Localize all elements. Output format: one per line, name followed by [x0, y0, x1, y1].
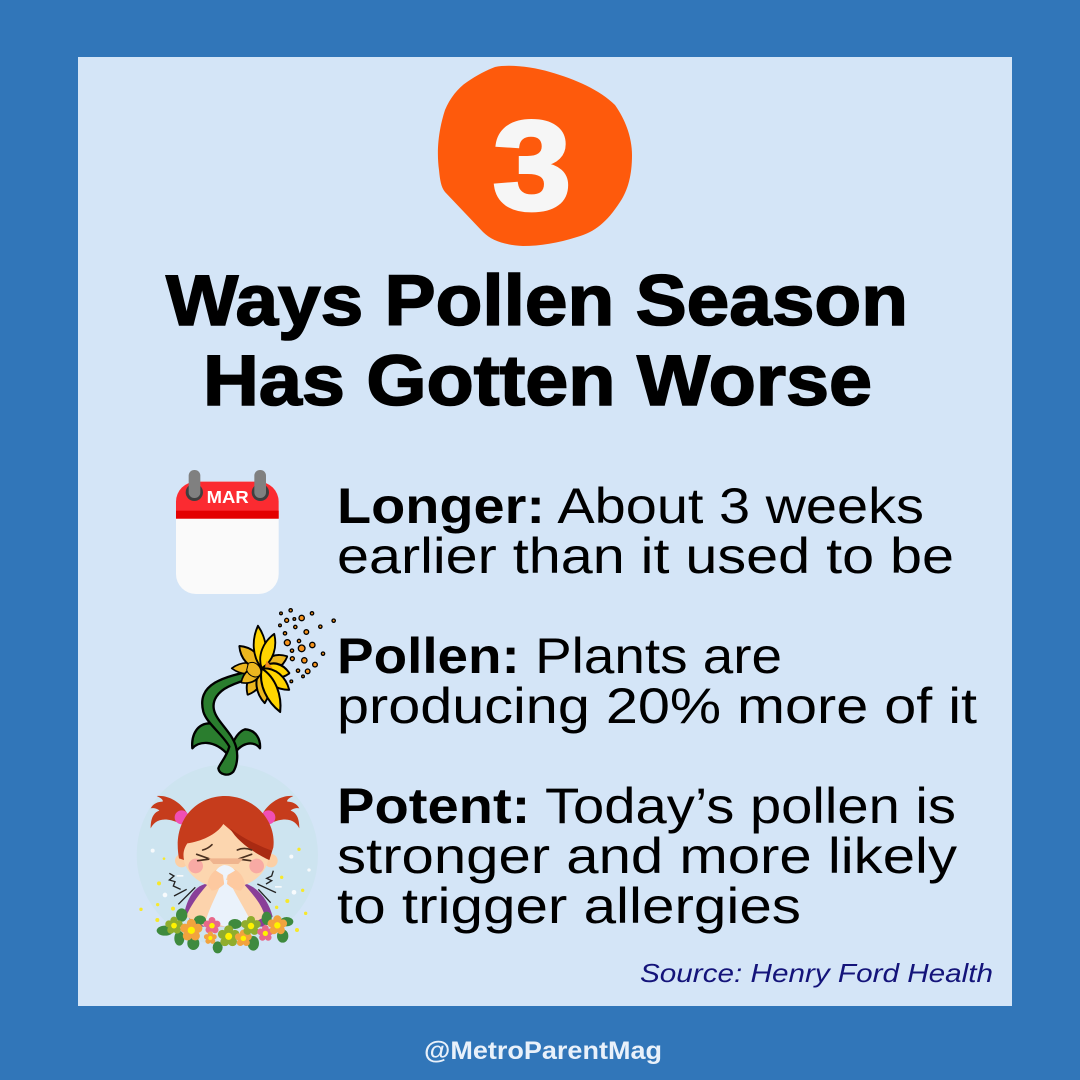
pigtails — [151, 796, 299, 828]
hair — [178, 796, 274, 860]
icon: calendar: MAR — [207, 487, 249, 507]
text block: longer: Longer: About 3 weeks — [337, 478, 924, 534]
face — [183, 822, 269, 888]
text block: pollen: producing 20% more of it — [337, 678, 977, 734]
hands — [207, 867, 224, 891]
body — [185, 884, 273, 927]
tissue — [206, 880, 249, 928]
flower stem and leaves — [192, 670, 260, 775]
text block: potent: stronger and more likely — [337, 828, 957, 884]
text block: pollen — [337, 628, 977, 734]
arms — [186, 883, 265, 927]
sneeze marks — [169, 871, 276, 904]
text block: pollen: Pollen: Plants are — [337, 628, 782, 684]
sparkles — [139, 848, 307, 932]
title: Has Gotten Worse — [203, 342, 872, 421]
text block: potent — [337, 778, 957, 934]
text block: potent: to trigger allergies — [337, 878, 801, 934]
pollen grains — [279, 609, 335, 683]
panel: content — [78, 57, 1012, 1006]
title: Ways Pollen Season — [166, 262, 908, 341]
social handle: @MetroParentMag — [424, 1037, 662, 1065]
badge: number 3 — [438, 66, 632, 246]
icon: flower releasing pollen — [192, 609, 335, 775]
icon: calendar — [176, 470, 279, 594]
badge: number 3: 3 — [493, 95, 571, 236]
text block: potent: Potent: Today’s pollen is — [337, 778, 956, 834]
text block: longer: earlier than it used to be — [337, 528, 954, 584]
icon: girl sneezing — [137, 764, 318, 953]
text block: longer — [337, 478, 954, 584]
flower garland — [157, 908, 293, 953]
ears — [175, 854, 188, 867]
title — [166, 262, 908, 421]
source note: Source: Henry Ford Health — [640, 958, 993, 988]
flower head — [232, 625, 293, 714]
closed eyes — [197, 845, 252, 861]
